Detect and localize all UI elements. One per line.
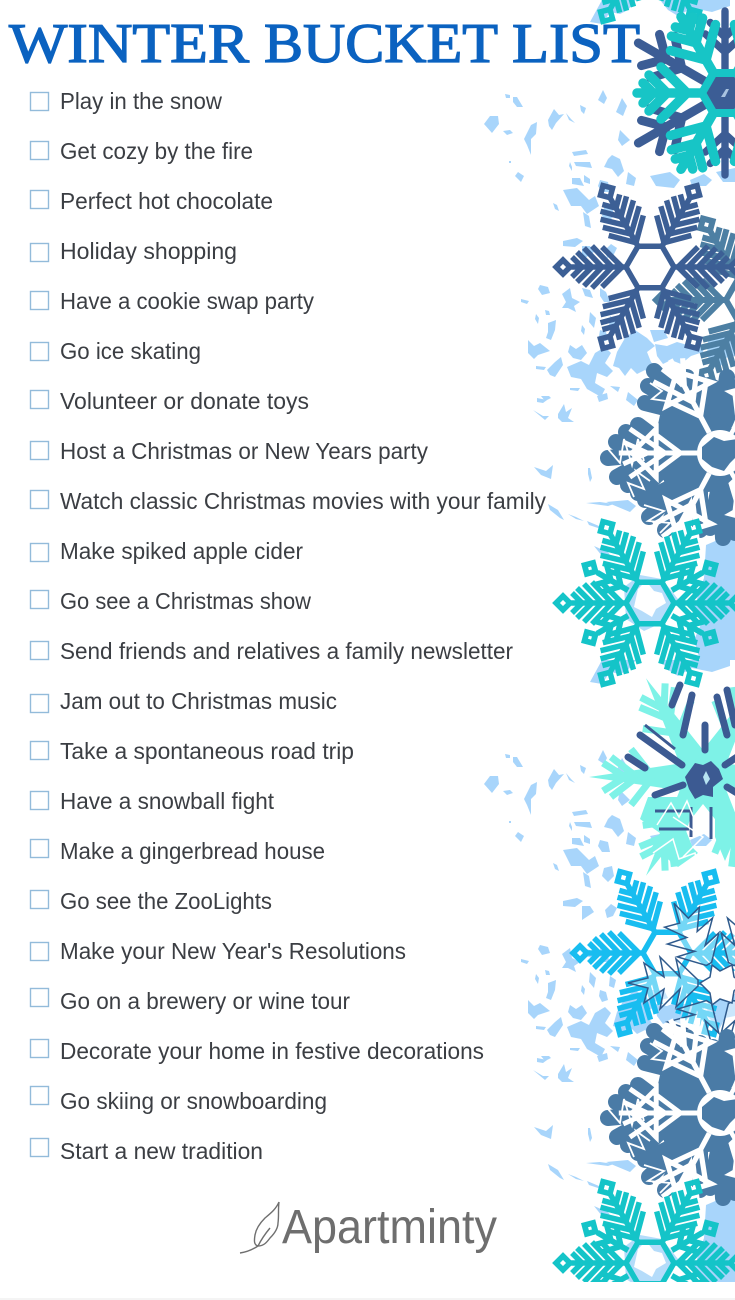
snowflake: teal bottom <box>552 1178 735 1282</box>
snowflake: teal fern <box>556 511 735 695</box>
decorative snowflake column <box>484 0 735 1300</box>
title: LIST <box>512 13 640 75</box>
snowflake: navy outline <box>628 902 735 1046</box>
snowflake: teal and navy top <box>626 4 735 182</box>
snowflake: navy fern <box>556 175 735 359</box>
snowflake: steel fragment behind navy flake <box>656 208 735 392</box>
item: Decorate your home in festive decorations: Decorate your home in festive decorations <box>60 1038 484 1064</box>
item: Jam out to Christmas music: Jam out to Christmas music <box>60 688 337 714</box>
checklist <box>30 88 546 1164</box>
item: Perfect hot chocolate: Perfect hot chocolate <box>60 188 273 214</box>
logo: Apartminty <box>240 1201 497 1254</box>
item: Host a Christmas or New Years party: Host a Christmas or New Years party <box>60 438 428 464</box>
ice debris: lower <box>484 660 735 1300</box>
snowflake: cyan fern <box>573 861 735 1045</box>
snowflake: teal remnant at top <box>597 0 703 25</box>
item: Start a new tradition: Start a new tradition <box>60 1138 263 1164</box>
item: Get cozy by the fire: Get cozy by the fire <box>60 138 253 164</box>
item: Volunteer or donate toys: Volunteer or donate toys <box>60 388 309 414</box>
item: Make a gingerbread house: Make a gingerbread house <box>60 838 325 864</box>
item: Go see a Christmas show: Go see a Christmas show <box>60 588 311 614</box>
wordmark: Apartminty <box>282 1201 497 1254</box>
item: Watch classic Christmas movies with your family: Watch classic Christmas movies with your family <box>60 488 546 514</box>
item: Play in the snow: Play in the snow <box>60 88 222 114</box>
snowflake: steel blue lower <box>608 1008 735 1218</box>
title: WINTER <box>9 13 250 75</box>
item: Go see the ZooLights: Go see the ZooLights <box>60 888 272 914</box>
item: Holiday shopping: Holiday shopping <box>60 238 237 264</box>
item: Go on a brewery or wine tour: Go on a brewery or wine tour <box>60 988 350 1014</box>
item: Go skiing or snowboarding: Go skiing or snowboarding <box>60 1088 327 1114</box>
item: Take a spontaneous road trip: Take a spontaneous road trip <box>60 738 354 764</box>
item: Make your New Year's Resolutions: Make your New Year's Resolutions <box>60 938 406 964</box>
ice debris: upper <box>484 0 735 660</box>
item: Go ice skating: Go ice skating <box>60 338 201 364</box>
item: Have a cookie swap party: Have a cookie swap party <box>60 288 314 314</box>
item: Send friends and relatives a family newsletter: Send friends and relatives a family newsletter <box>60 638 513 664</box>
title: BUCKET <box>264 13 498 75</box>
item: Make spiked apple cider: Make spiked apple cider <box>60 538 303 564</box>
snowflake: steel blue with white overlay <box>608 348 735 558</box>
item: Have a snowball fight: Have a snowball fight <box>60 788 275 814</box>
snowflake: aqua and navy <box>589 670 735 884</box>
icon: leaf <box>240 1202 279 1253</box>
title <box>9 13 640 75</box>
